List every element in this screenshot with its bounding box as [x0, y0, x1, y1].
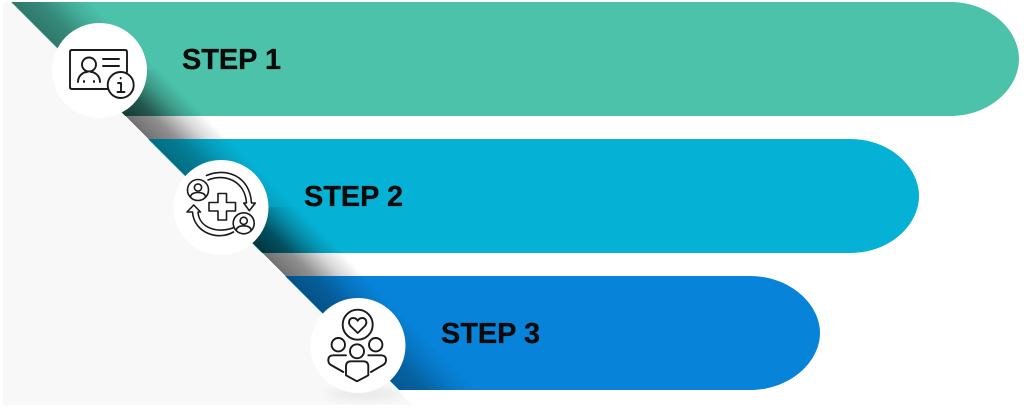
icon: community care group: [328, 310, 386, 381]
badge: step 2 circle: [174, 160, 268, 255]
step 3 bar: [285, 276, 820, 390]
heading: step 3: STEP 3: [441, 318, 540, 350]
heading: step 2: STEP 2: [304, 181, 403, 213]
icon: patient transfer with medical cross: [187, 172, 255, 236]
heading: step 1: STEP 1: [182, 44, 281, 76]
badge: step 1 circle: [52, 23, 147, 118]
step 2 bar: [148, 139, 919, 253]
diagonal fold shadows: [12, 2, 500, 390]
circle shadow under step 3: [326, 389, 402, 399]
badge: step 3 circle: [310, 298, 406, 393]
icon: id card with info: [70, 50, 134, 98]
step 1 bar: [11, 2, 1019, 116]
panel: grey diagonal background: [3, 3, 412, 405]
